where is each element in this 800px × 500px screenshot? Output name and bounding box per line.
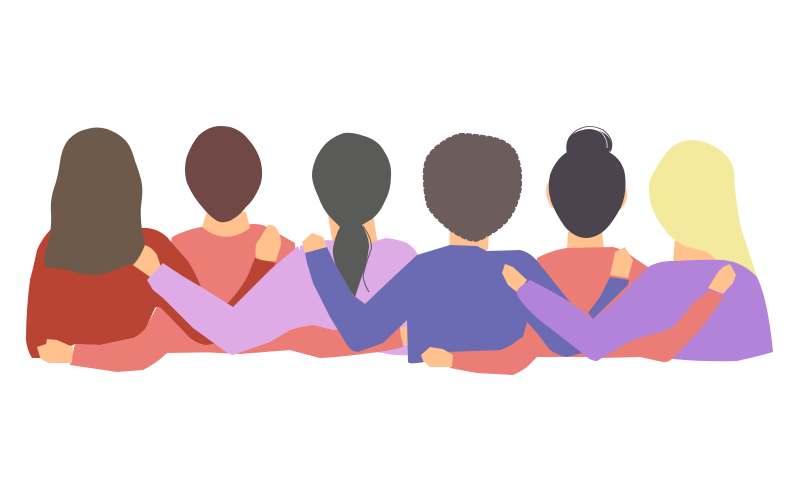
bun strands xyxy=(567,126,612,152)
hand: on person 2 shoulder xyxy=(255,225,281,261)
person 5 dark hair with bun xyxy=(549,126,626,238)
person 3 grey hair with ponytail xyxy=(312,133,391,297)
hand: on person 4 back xyxy=(502,264,527,293)
hand: person 5 on blue shoulder xyxy=(610,247,633,278)
hand: person 2 at left end xyxy=(37,339,73,363)
salmon lower arm of person 2 behind person 3 xyxy=(200,325,403,358)
person 2: salmon sweater with neck xyxy=(70,212,320,372)
person 4 neck xyxy=(449,230,489,250)
small hand behind person 4 xyxy=(400,326,408,346)
red sleeve of person 1 behind person 2 xyxy=(226,258,276,315)
person 4 curly hair xyxy=(424,134,521,241)
blue sleeve on salmon back xyxy=(588,277,629,319)
hand: person 5 arm at bottom xyxy=(421,347,453,367)
brown long hair xyxy=(44,128,147,275)
hand: person 4 on person 3 xyxy=(302,233,327,253)
person 2 dark hair xyxy=(185,126,262,222)
person 4 blue sweater xyxy=(305,245,629,363)
loose hair strand xyxy=(363,226,371,292)
salmon arm of person 5 on person 6 xyxy=(600,290,724,362)
hand: on person 1 shoulder xyxy=(133,245,162,277)
person 6 purple arm over friends xyxy=(517,261,735,361)
person 3 lilac arm over friends xyxy=(147,246,322,355)
salmon sweater person 5 xyxy=(445,247,680,375)
person 5: neck, ears and sweater xyxy=(445,182,724,375)
hand: person 6 wrapped around shoulder xyxy=(708,264,736,294)
person 6: blonde woman, purple sweater back xyxy=(640,140,773,361)
person 3: lilac sweater back xyxy=(300,215,418,355)
person 1: red sweater xyxy=(26,128,281,358)
